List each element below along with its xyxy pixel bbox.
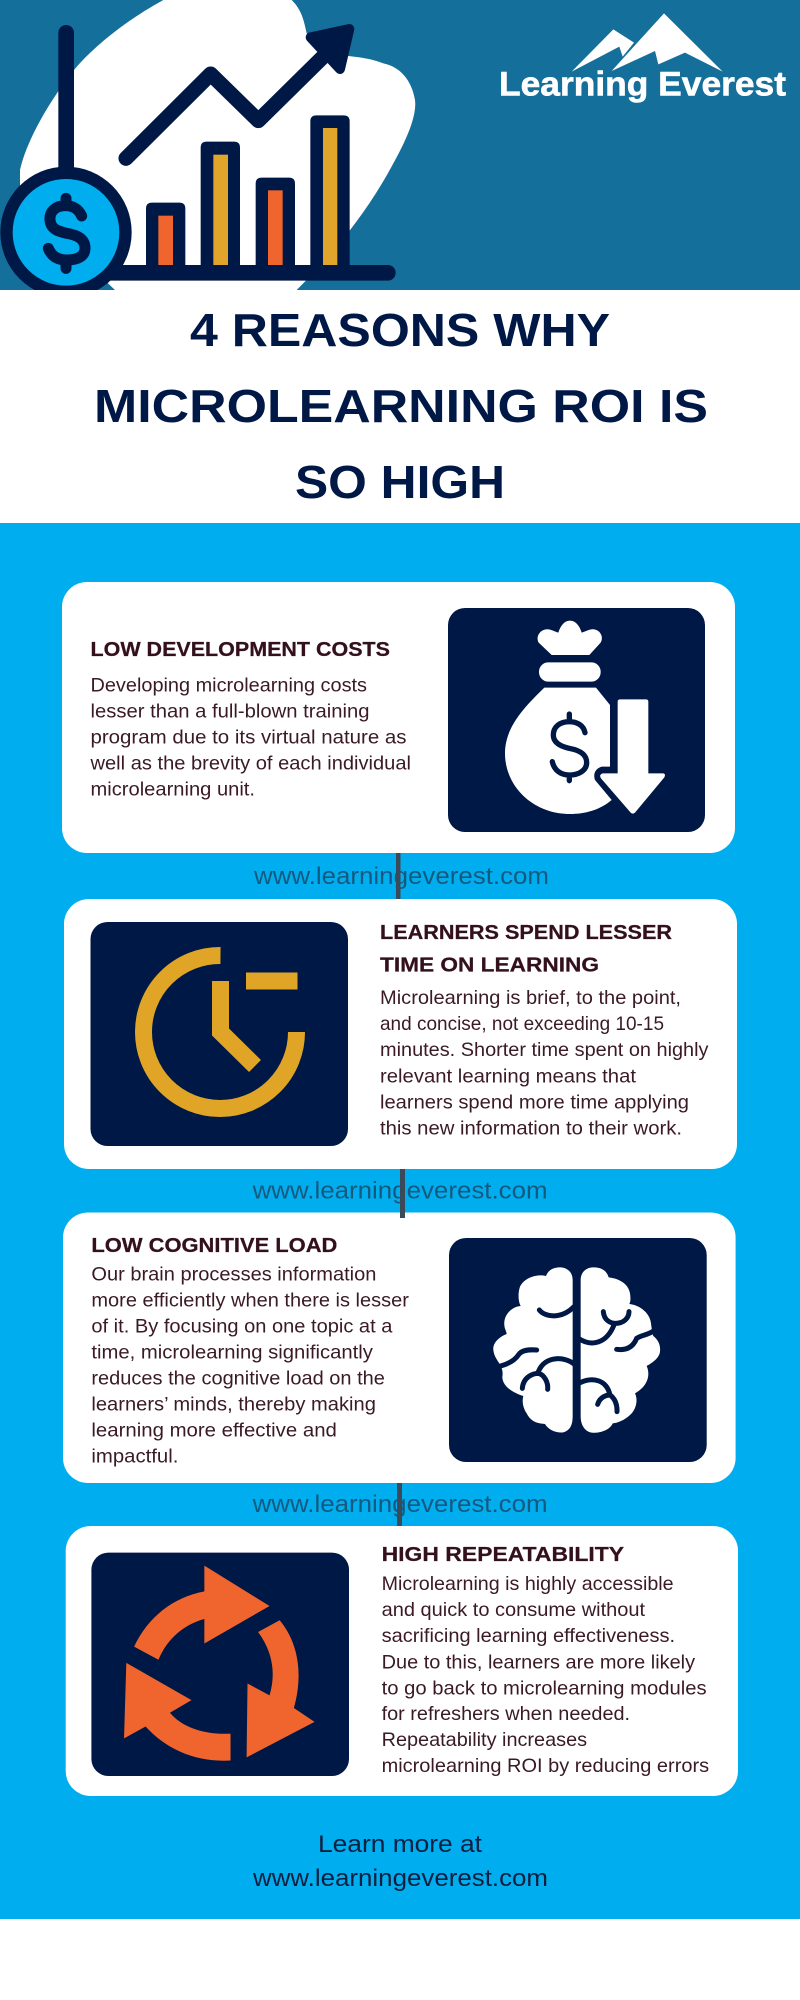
body text: relevant learning means that [380, 1066, 637, 1088]
body text: learning more effective and [91, 1419, 337, 1441]
connector 2 [400, 1169, 405, 1218]
panel: low development costs [62, 582, 735, 853]
body text: program due to its virtual nature as [90, 726, 407, 748]
body text: for refreshers when needed. [382, 1703, 630, 1725]
heading: LEARNERS SPEND LESSER [380, 922, 673, 944]
body text: Microlearning is highly accessible [382, 1573, 674, 1595]
card background [64, 899, 737, 1169]
website label 1: www.learningeverest.com [253, 863, 549, 890]
bar 4 [310, 115, 350, 270]
logo mountains [572, 13, 723, 72]
website label 3: www.learningeverest.com [252, 1491, 548, 1518]
body text: Our brain processes information [91, 1264, 376, 1286]
icon: brain [449, 1238, 707, 1462]
horizontal axis [100, 265, 396, 281]
heading: TIME ON LEARNING [380, 955, 599, 977]
title [94, 304, 708, 508]
body text: reduces the cognitive load on the [91, 1367, 385, 1389]
header banner [0, 0, 800, 298]
connector 3 [397, 1483, 402, 1526]
vertical axis [58, 25, 74, 175]
title: 4 REASONS WHY [190, 304, 610, 356]
bar 3 [256, 178, 295, 270]
rising trend arrow [126, 29, 349, 158]
body text: microlearning unit. [90, 778, 255, 800]
panel: learners spend lesser time [64, 899, 737, 1169]
body text: time, microlearning significantly [91, 1342, 373, 1364]
heading: LOW DEVELOPMENT COSTS [90, 639, 390, 661]
card background [63, 1212, 736, 1483]
body text: this new information to their work. [380, 1118, 682, 1140]
dollar coin [0, 167, 132, 298]
white blob background [20, 0, 415, 290]
panel: low cognitive load [63, 1212, 736, 1483]
title: MICROLEARNING ROI IS [94, 380, 708, 432]
body text: Microlearning is brief, to the point, [380, 987, 681, 1009]
icon: clock [90, 922, 348, 1146]
body text: learners spend more time applying [380, 1092, 689, 1114]
icon: money bag with down arrow [448, 608, 705, 832]
body text: microlearning ROI by reducing errors [382, 1755, 709, 1777]
website label 2: www.learningeverest.com [252, 1178, 548, 1204]
logo wordmark: Learning Everest [499, 66, 786, 104]
body text: learners’ minds, thereby making [91, 1393, 376, 1415]
body text: to go back to microlearning modules [382, 1678, 707, 1700]
body text: lesser than a full-blown training [90, 700, 370, 722]
icon: rising chart with coin [0, 0, 415, 298]
body text: and concise, not exceeding 10-15 [380, 1013, 664, 1035]
body text: Developing microlearning costs [90, 674, 367, 696]
footer call to action: www.learningeverest.com [252, 1865, 548, 1892]
body text: and quick to consume without [382, 1599, 646, 1621]
heading: HIGH REPEATABILITY [382, 1544, 625, 1566]
body text [89, 674, 411, 800]
bar 2 [201, 142, 240, 270]
panel: high repeatability [66, 1526, 738, 1796]
title: SO HIGH [295, 456, 505, 508]
body text: sacrificing learning effectiveness. [382, 1625, 675, 1647]
body text: Due to this, learners are more likely [382, 1652, 695, 1674]
body text: minutes. Shorter time spent on highly [380, 1039, 709, 1061]
logo: Learning Everest [499, 13, 786, 104]
heading: LOW COGNITIVE LOAD [91, 1235, 337, 1257]
body text [380, 987, 709, 1140]
body text [382, 1573, 709, 1777]
body text [91, 1264, 409, 1467]
bar 1 [146, 203, 185, 270]
body text: more efficiently when there is lesser [91, 1289, 409, 1311]
icon: repeat arrows [91, 1553, 349, 1776]
body text: impactful. [91, 1445, 178, 1467]
card background [66, 1526, 738, 1796]
card background [62, 582, 735, 853]
blue content panel [0, 523, 800, 1919]
connector 1 [396, 853, 400, 899]
footer call to action: Learn more at [318, 1831, 482, 1858]
body text: of it. By focusing on one topic at a [91, 1315, 393, 1337]
body text: Repeatability increases [382, 1729, 587, 1751]
body text: well as the brevity of each individual [89, 752, 411, 774]
footer call to action [252, 1831, 548, 1892]
heading [380, 922, 673, 977]
